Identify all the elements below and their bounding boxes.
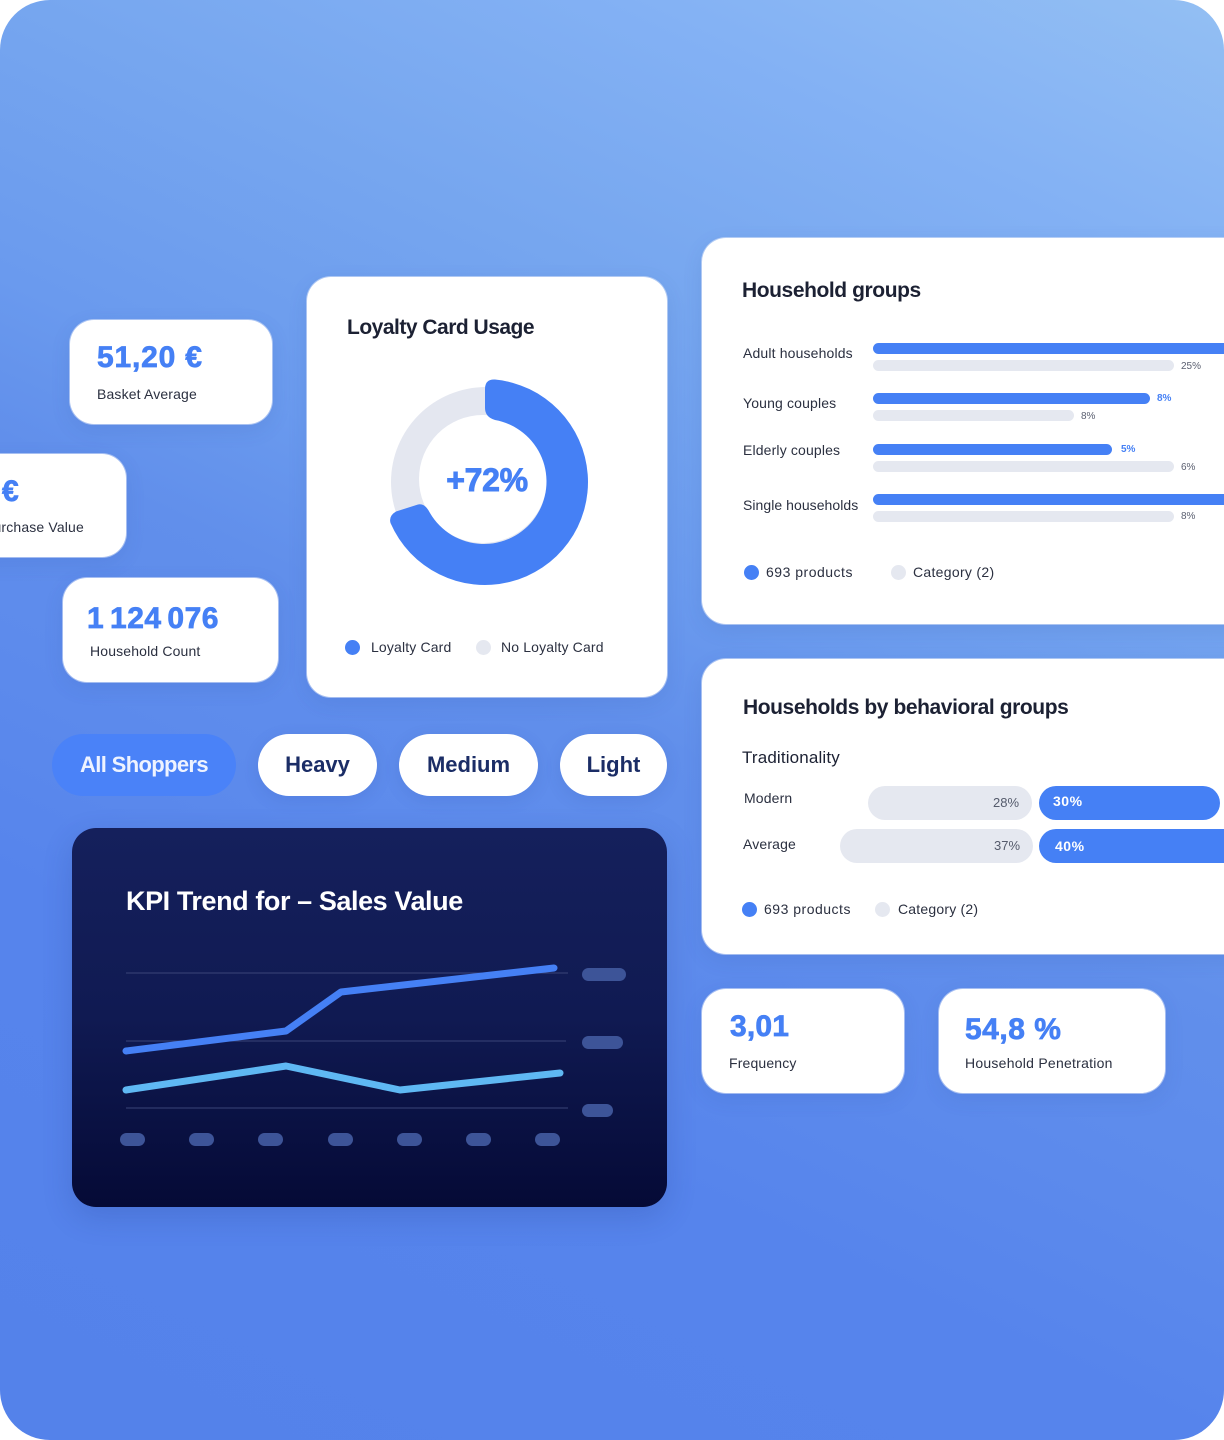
row: modern: Modern bbox=[744, 790, 792, 806]
row: young couples: 8% bbox=[1081, 411, 1095, 422]
legend: 693 products bbox=[766, 564, 853, 580]
panel: household groups bbox=[702, 238, 1224, 624]
donut chart: +72% bbox=[446, 462, 528, 498]
row: young couples bbox=[743, 393, 1172, 422]
stat card: household count bbox=[63, 578, 278, 682]
row: single households bbox=[743, 494, 1224, 522]
stat card: basket average: 51,20 € bbox=[97, 341, 203, 374]
row: modern bbox=[744, 786, 1220, 820]
filter pill: light: Light bbox=[587, 752, 640, 777]
row: adult households bbox=[743, 343, 1224, 372]
stat card: household penetration bbox=[939, 989, 1165, 1093]
filter pill: all shoppers bbox=[52, 734, 236, 796]
stat card: frequency bbox=[702, 989, 904, 1093]
panel: KPI trend bbox=[72, 828, 667, 1207]
legend: Category (2) bbox=[913, 564, 994, 580]
filter pill: medium bbox=[399, 734, 538, 796]
panel: behavioral groups bbox=[702, 659, 1224, 954]
legend: 693 products bbox=[764, 901, 851, 917]
line chart bbox=[122, 964, 568, 1108]
stat card: household penetration: Household Penetration bbox=[965, 1055, 1113, 1071]
row: modern: 28% bbox=[993, 795, 1019, 810]
filter pill: light bbox=[560, 734, 667, 796]
row: elderly couples bbox=[743, 442, 1196, 473]
stat card: basket average bbox=[70, 320, 272, 424]
row: single households: 8% bbox=[1181, 511, 1195, 522]
filter pill: medium: Medium bbox=[427, 752, 510, 777]
heading: Loyalty Card Usage bbox=[347, 316, 534, 339]
stat card: frequency: 3,01 bbox=[730, 1010, 789, 1043]
legend: Category (2) bbox=[898, 901, 978, 917]
row: adult households: 25% bbox=[1181, 361, 1201, 372]
stat card: purchase value: € bbox=[2, 475, 20, 508]
row: elderly couples: 6% bbox=[1181, 462, 1195, 473]
row: modern: 30% bbox=[1053, 793, 1083, 809]
filter pill: heavy: Heavy bbox=[285, 752, 350, 777]
legend: Loyalty Card bbox=[371, 639, 451, 655]
subheading: Traditionality bbox=[742, 748, 840, 767]
legend bbox=[744, 564, 994, 580]
stat card: frequency: Frequency bbox=[729, 1055, 796, 1071]
row: elderly couples: 5% bbox=[1121, 444, 1135, 455]
stat card: basket average: Basket Average bbox=[97, 386, 197, 402]
heading: Households by behavioral groups bbox=[743, 696, 1068, 719]
row: young couples: 8% bbox=[1157, 393, 1171, 404]
legend: No Loyalty Card bbox=[501, 639, 604, 655]
stat card: purchase value bbox=[0, 454, 126, 557]
row: elderly couples: Elderly couples bbox=[743, 442, 840, 458]
legend bbox=[742, 901, 978, 917]
row: average: 37% bbox=[994, 838, 1020, 853]
row: average: 40% bbox=[1055, 838, 1085, 854]
row: single households: Single households bbox=[743, 497, 858, 513]
row: average: Average bbox=[743, 836, 796, 852]
legend bbox=[345, 639, 604, 655]
filter pill: all shoppers: All Shoppers bbox=[80, 752, 208, 777]
heading: KPI Trend for – Sales Value bbox=[126, 886, 463, 916]
heading: Household groups bbox=[742, 279, 921, 302]
stat card: household penetration: 54,8 % bbox=[965, 1013, 1061, 1046]
stat card: household count: 1 124 076 bbox=[87, 602, 219, 635]
row: average bbox=[743, 829, 1224, 863]
stat card: household count: Household Count bbox=[90, 643, 200, 659]
row: adult households: Adult households bbox=[743, 345, 853, 361]
row: young couples: Young couples bbox=[743, 395, 836, 411]
panel: loyalty card usage bbox=[307, 277, 667, 697]
donut chart bbox=[390, 380, 588, 585]
axis placeholders bbox=[120, 968, 626, 1146]
filter pill: heavy bbox=[258, 734, 377, 796]
